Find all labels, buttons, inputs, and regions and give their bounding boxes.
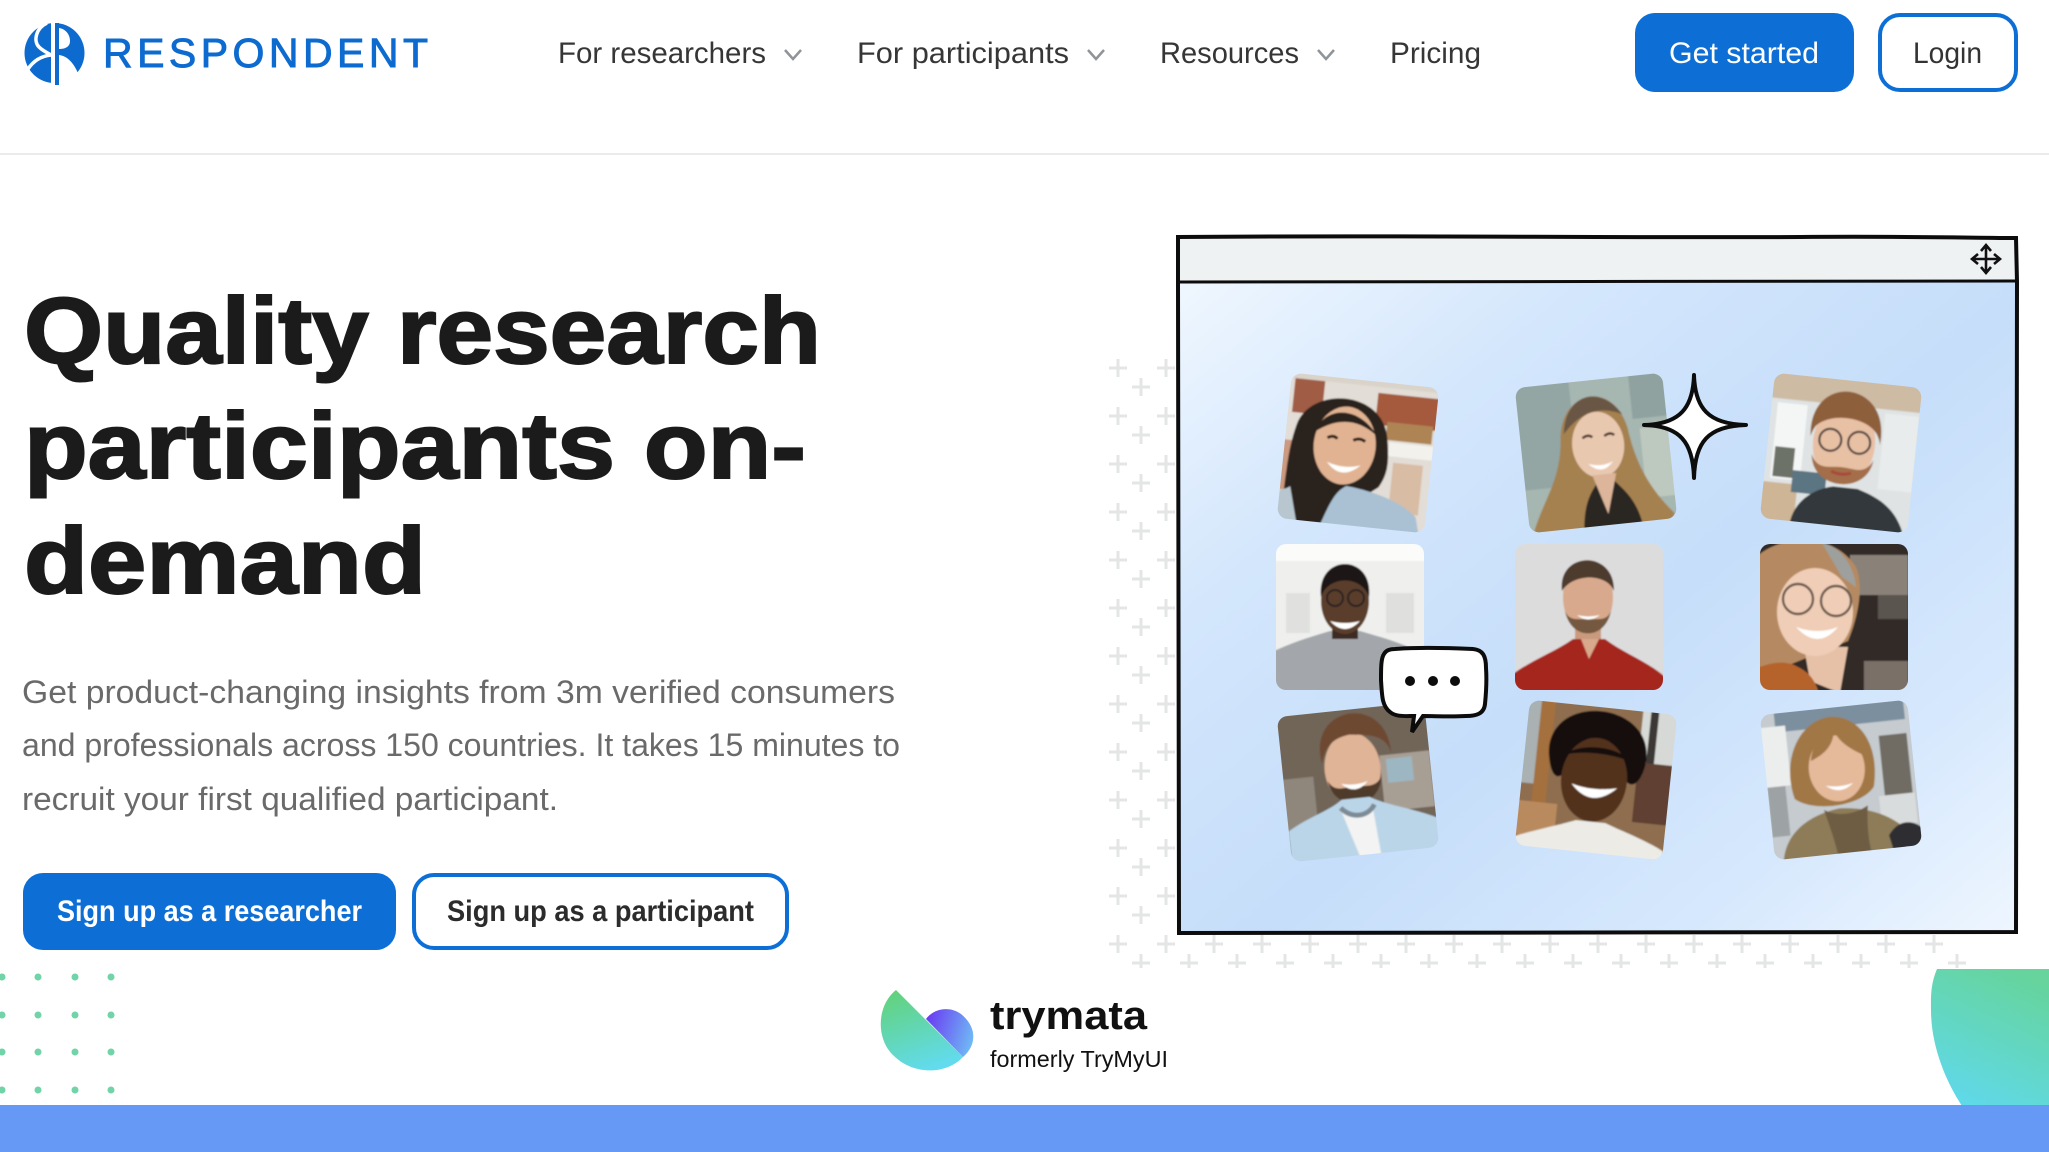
heading: demand [24, 508, 426, 613]
nav item: For participants: For participants [857, 37, 1069, 70]
photo: woman with long blonde hair [1516, 374, 1676, 532]
button: Sign up as a participant [414, 875, 787, 948]
icon: sparkle star [1644, 375, 1746, 478]
nav item: For researchers: For researchers [558, 37, 766, 70]
nav item: Resources: Resources [1160, 37, 1299, 70]
icon: move arrows [1972, 245, 2000, 273]
intro paragraph: and professionals across 150 countries. It takes 15 minutes to [22, 727, 900, 763]
navigation bar [24, 13, 2016, 92]
photo: smiling man in grey shirt [1276, 544, 1424, 690]
photo: man in red polo [1515, 544, 1663, 690]
intro paragraph [22, 674, 900, 817]
button: Get started [1635, 13, 1854, 92]
photo: woman with olive jacket [1760, 700, 1922, 860]
intro paragraph: Get product-changing insights from 3m verified consumers [22, 674, 895, 710]
button: Get started: Get started [1669, 37, 1819, 70]
icon: speech bubble [1381, 648, 1486, 732]
button: Login: Login [1913, 37, 1982, 70]
photo: man with glasses and beard [1760, 374, 1922, 532]
photo: woman with round glasses [1760, 544, 1908, 690]
partner logo: trymata [881, 990, 1168, 1072]
intro paragraph: recruit your first qualified participant. [22, 781, 558, 817]
heading [24, 278, 821, 613]
logo: Respondent [24, 14, 92, 92]
button: Login [1880, 15, 2016, 90]
button: Sign up as a researcher [23, 873, 396, 950]
heading: participants on- [24, 393, 806, 498]
logo wordmark: RESPONDENT [103, 30, 428, 76]
heading: Quality research [24, 278, 821, 383]
photo: bearded man in denim shirt [1278, 706, 1438, 862]
dot grid [0, 974, 114, 1094]
bottom blue band [0, 1105, 2049, 1152]
icon: trymata leaf [881, 990, 973, 1070]
nav item: Pricing: Pricing [1390, 37, 1481, 70]
button: Sign up as a participant: Sign up as a participant [447, 895, 754, 928]
button: Sign up as a researcher: Sign up as a researcher [57, 895, 362, 928]
photo: smiling young man [1516, 700, 1676, 860]
illustration: app window with participants [1178, 236, 2017, 933]
tagline: formerly TryMyUI [990, 1046, 1168, 1072]
decorative teal semicircle [1931, 969, 2049, 1106]
brand name: trymata [990, 994, 1148, 1038]
photo: smiling woman with dark hair [1278, 374, 1438, 532]
